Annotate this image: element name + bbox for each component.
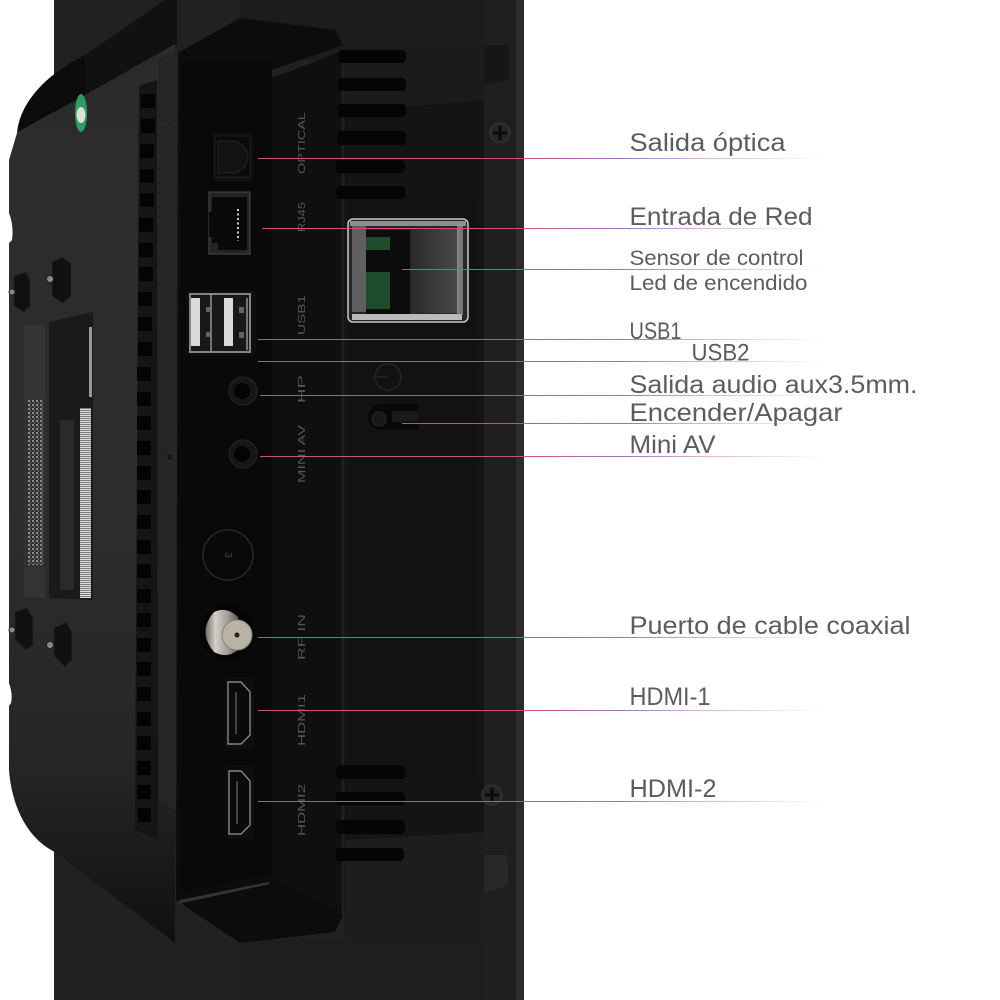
sensor window — [348, 219, 468, 322]
hdmi 2 port — [226, 765, 254, 839]
usb ports — [186, 290, 256, 356]
tv body — [54, 0, 524, 1000]
callout: Salida óptica: Salida óptica — [630, 129, 786, 157]
port captions: OPTICAL — [297, 111, 308, 174]
top slot band — [85, 0, 177, 95]
blank cap: 3 — [222, 552, 233, 558]
port captions: HDMI2 — [297, 783, 308, 836]
hdmi 1 port — [225, 677, 254, 749]
callout: HDMI-2: HDMI-2 — [630, 775, 716, 803]
port captions: USB1 — [297, 294, 308, 335]
callout: USB1: USB1 — [630, 318, 682, 345]
lower vents — [336, 765, 405, 861]
port captions: RF IN — [297, 614, 308, 660]
callout: Sensor de control / Led de encendido — [402, 247, 825, 295]
callout: HDMI-1: HDMI-1 — [630, 683, 710, 711]
rating labels — [24, 312, 93, 600]
callout: Salida audio aux3.5mm.: Salida audio aux3.5mm. — [630, 371, 918, 399]
power button — [368, 404, 418, 430]
rear connector cover — [343, 45, 484, 940]
port captions — [297, 111, 308, 836]
left vent column — [135, 80, 158, 840]
callout: Entrada de Red: Entrada de Red — [630, 203, 812, 231]
callout: USB2: USB2 — [692, 340, 750, 366]
callout: Sensor de control / Led de encendido: Sensor de control — [630, 247, 804, 270]
network port — [209, 192, 250, 254]
callout: Sensor de control / Led de encendido: Led de encendido — [630, 272, 808, 295]
port captions: RJ45 — [297, 201, 308, 232]
port captions: HP — [297, 374, 308, 403]
port captions: HDMI1 — [297, 693, 308, 746]
coaxial port — [200, 605, 254, 659]
callout: Puerto de cable coaxial: Puerto de cable coaxial — [630, 612, 910, 640]
audio jack — [229, 377, 257, 405]
left back panel — [9, 43, 177, 943]
port captions: MINI AV — [297, 424, 308, 483]
mounting knobs — [9, 257, 72, 667]
callout: Encender/Apagar: Encender/Apagar — [630, 399, 842, 427]
side strip — [158, 48, 178, 812]
power symbol — [372, 364, 401, 390]
mini av jack — [229, 440, 257, 468]
screws — [166, 123, 510, 805]
green sticker — [75, 94, 87, 132]
port recess — [176, 18, 345, 943]
optical port — [213, 133, 253, 181]
blank cap — [203, 530, 253, 580]
callout: Mini AV: Mini AV — [630, 431, 716, 459]
upper vents — [336, 50, 406, 199]
